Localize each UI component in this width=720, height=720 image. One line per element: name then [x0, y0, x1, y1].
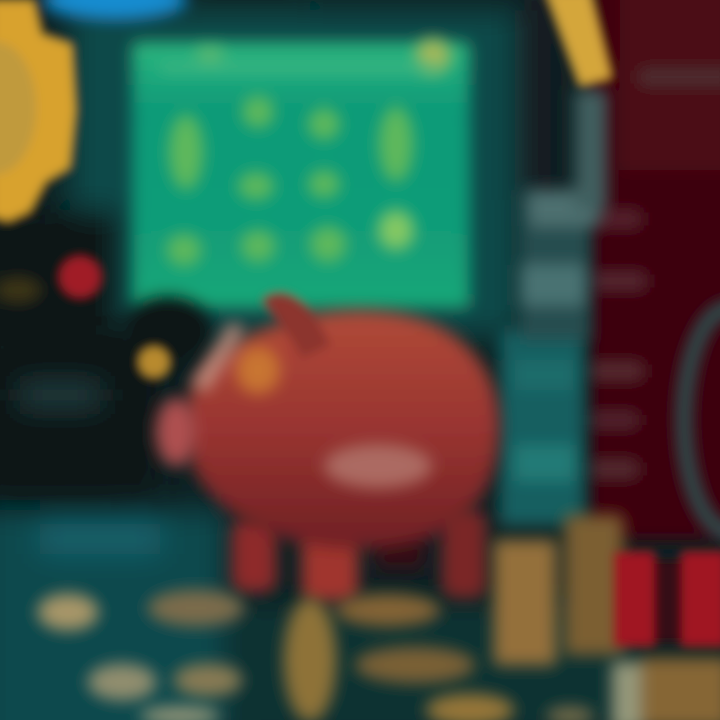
icon: golden gear	[0, 0, 76, 222]
panel: dark red curtain on the right	[590, 0, 720, 540]
pig legs	[232, 510, 486, 601]
pig side label	[324, 444, 432, 488]
chart: cream base bottom right	[612, 658, 720, 720]
pig ear	[262, 293, 330, 358]
panel: teal table surface	[0, 510, 630, 720]
chart: stacks of gold coins	[494, 515, 623, 665]
icon: piggy bank	[124, 293, 499, 601]
panel: dark teal wall behind the screen	[0, 0, 560, 500]
icon: screen corner highlight	[416, 39, 450, 73]
icon: yellow pencil at top right	[545, 0, 612, 86]
icon: red indicator light	[59, 256, 101, 298]
pig black hat	[124, 296, 212, 364]
chart: red blocks	[614, 552, 720, 646]
pig snout	[156, 398, 196, 466]
pig body	[185, 311, 499, 548]
pig yellow eye	[138, 346, 170, 378]
icon: blue blob at top	[43, 0, 187, 20]
chart: teal and grey stacked column	[500, 90, 607, 525]
pig face highlight	[192, 322, 280, 394]
panel: green calendar screen	[132, 39, 470, 308]
panel: dark machine lower left	[0, 335, 160, 500]
icon: scattered coins	[38, 590, 594, 720]
icon: dim yellow indicator	[0, 277, 42, 303]
chart: screen cells	[160, 47, 440, 266]
icon: teal ring at right edge	[684, 308, 720, 532]
